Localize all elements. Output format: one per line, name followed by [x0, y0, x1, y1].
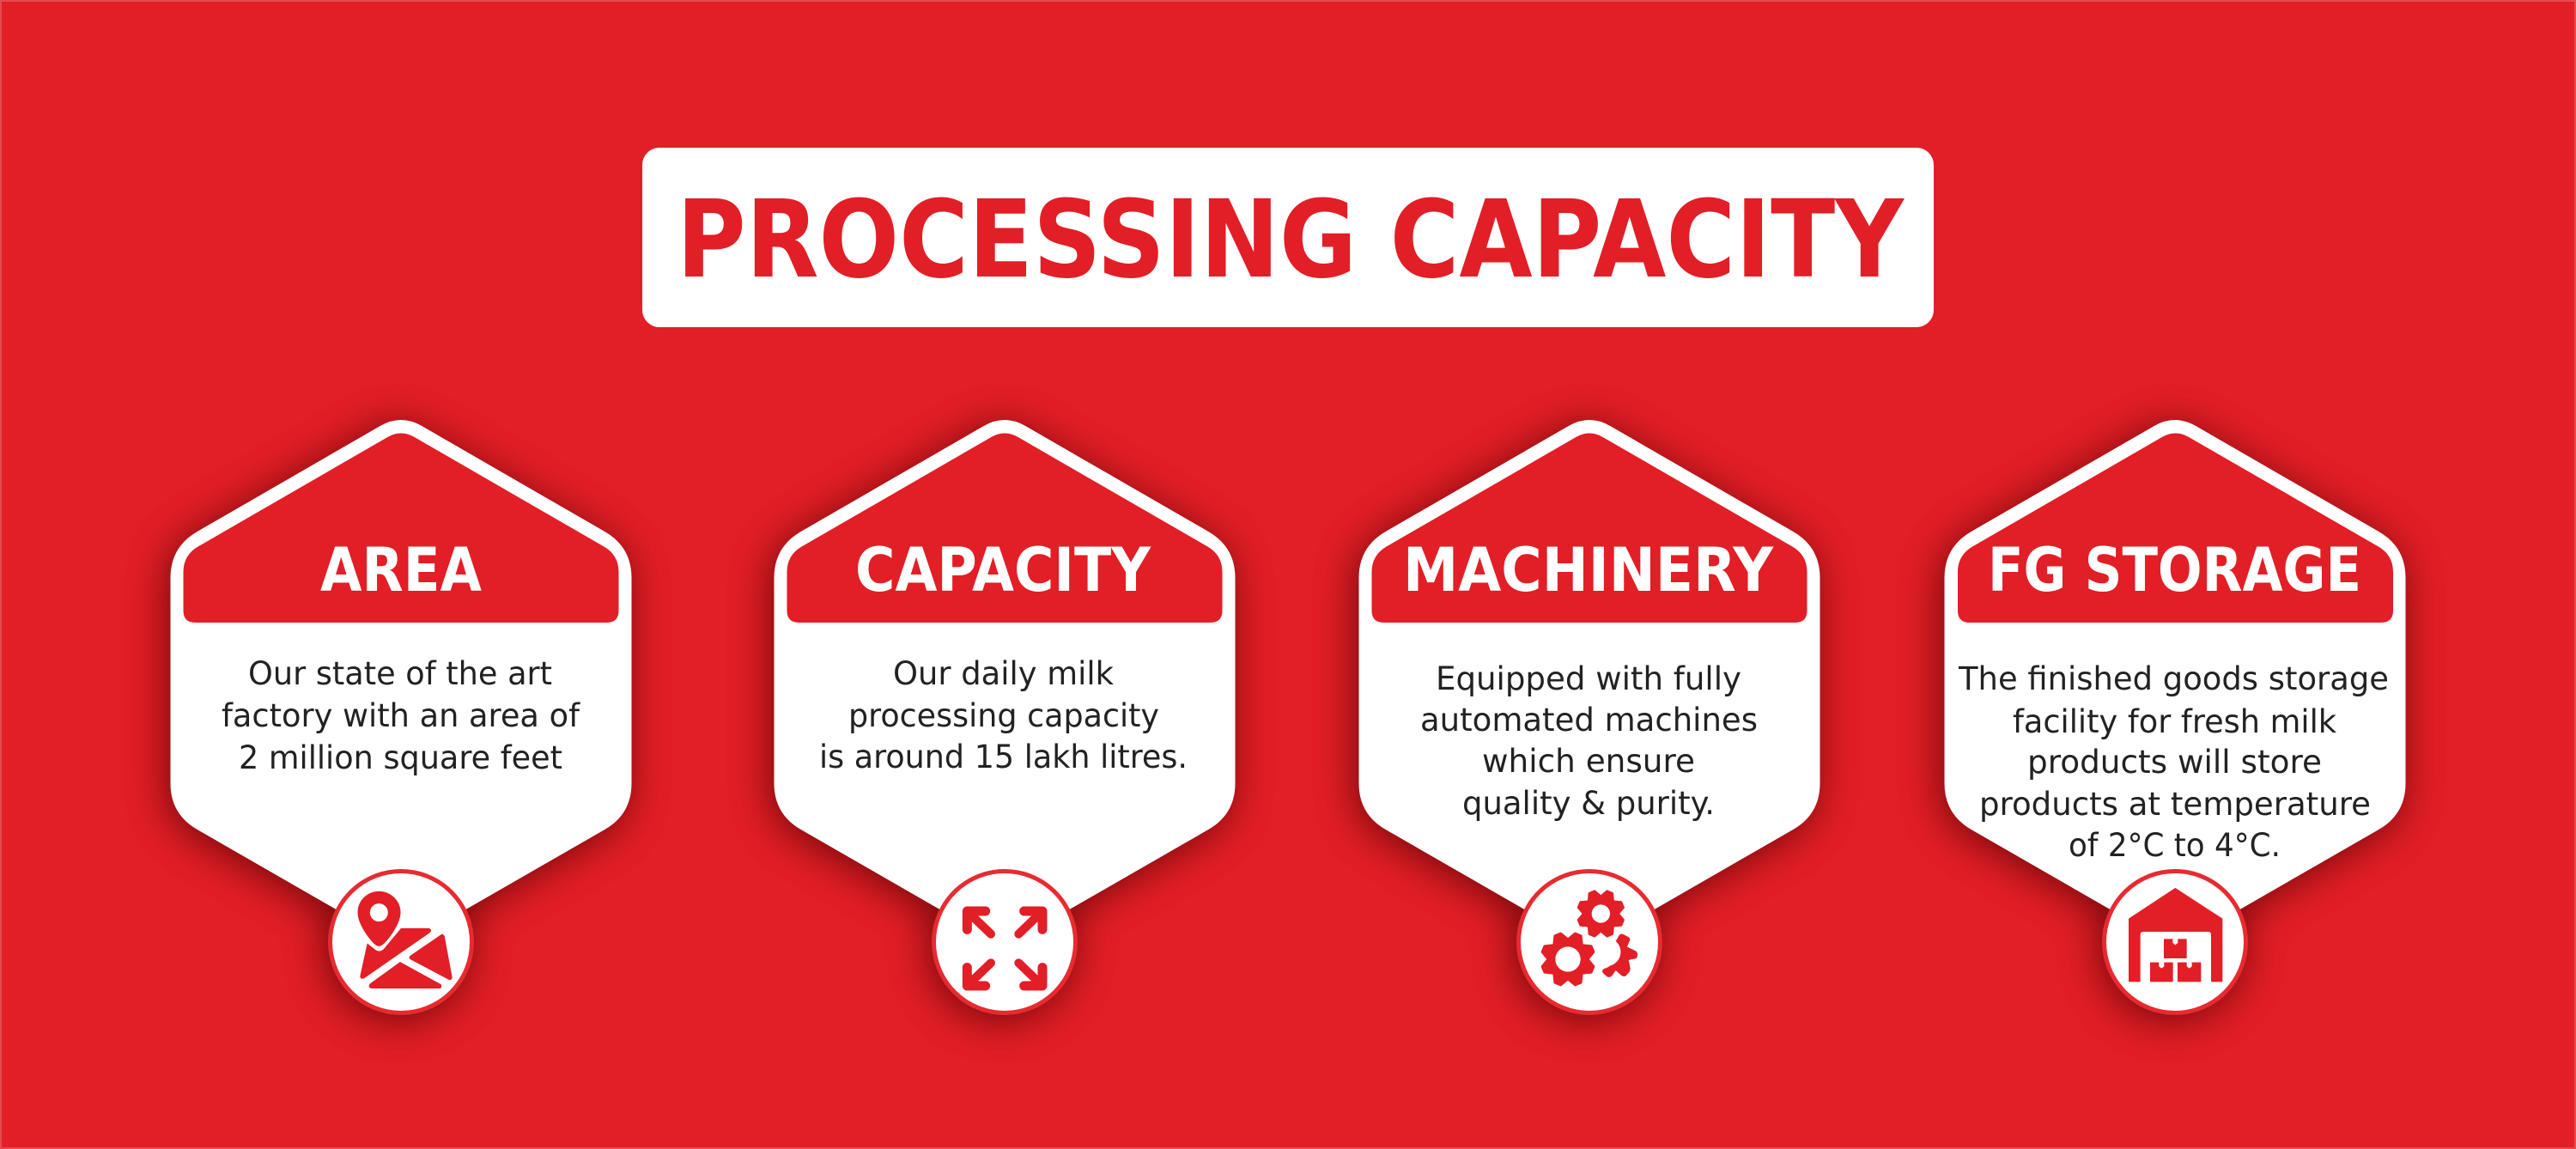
text: area description [222, 654, 580, 776]
text: machinery description [1420, 660, 1758, 822]
text: machinery description: automated machines [1420, 701, 1758, 739]
panel: area [167, 420, 632, 1020]
title [642, 148, 1934, 327]
heading: area: AREA [320, 535, 482, 605]
text: capacity description [819, 654, 1188, 775]
panel: fg storage [1941, 420, 2406, 1020]
text: fg storage description: The finished goods storage [1958, 660, 2389, 697]
heading: capacity: CAPACITY [855, 535, 1151, 605]
text: fg storage description: facility for fresh milk [2013, 702, 2336, 740]
text: machinery description: quality & purity. [1462, 784, 1715, 822]
heading band: fg storage [1958, 433, 2393, 623]
text: fg storage description [1958, 660, 2389, 864]
text: capacity description: Our daily milk [893, 654, 1114, 692]
text: capacity description: processing capacity [848, 696, 1159, 734]
heading: fg storage: FG STORAGE [1988, 535, 2361, 605]
heading band: area [184, 433, 618, 623]
text: machinery description: Equipped with fully [1436, 660, 1741, 697]
heading band: machinery [1372, 433, 1807, 623]
heading band: capacity [787, 433, 1223, 623]
text: fg storage description: of 2°C to 4°C. [2069, 826, 2281, 864]
panel: capacity [771, 420, 1235, 1020]
icon: map pin [330, 871, 472, 1013]
text: area description: Our state of the art [248, 654, 552, 692]
icon: gears [1518, 871, 1661, 1013]
icon: warehouse [2104, 871, 2246, 1013]
text: fg storage description: products at temperature [1979, 785, 2371, 823]
heading: machinery: MACHINERY [1403, 535, 1774, 605]
text: area description: factory with an area of [222, 696, 580, 734]
icon: expand arrows [934, 871, 1075, 1013]
text: capacity description: is around 15 lakh litres. [819, 738, 1188, 775]
text: fg storage description: products will store [2027, 743, 2322, 781]
text: area description: 2 million square feet [239, 739, 562, 776]
text: machinery description: which ensure [1482, 742, 1695, 780]
title: PROCESSING CAPACITY [677, 178, 1905, 302]
panel: machinery [1355, 420, 1820, 1020]
